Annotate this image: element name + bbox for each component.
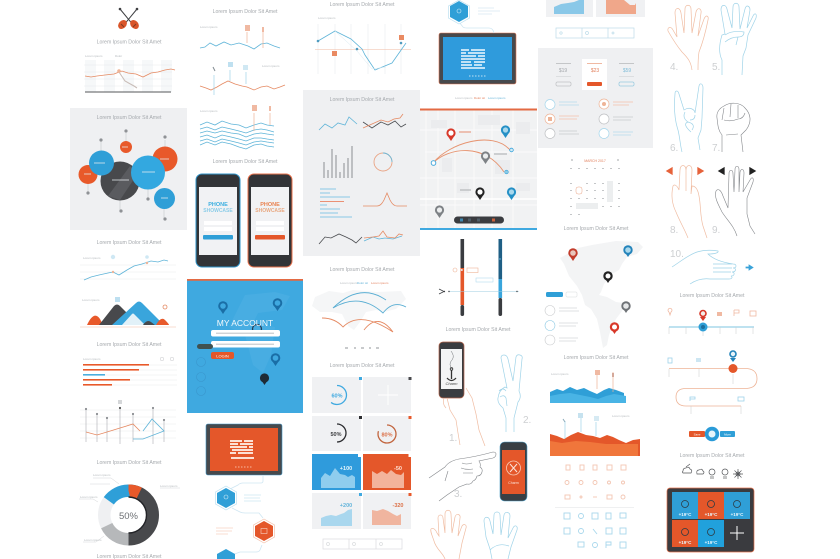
widget: weather tablet: +19°C [679, 512, 692, 517]
hand: four fingers blue bottom [484, 512, 517, 559]
chart: donut 50%: Lorem ipsum [93, 473, 111, 477]
legend: map: Lorem ipsum [455, 96, 473, 100]
chart: mountain area: Lorem ipsum [82, 298, 100, 302]
card: add new [363, 377, 412, 413]
connector: blue hexagon to tablet [459, 22, 494, 33]
heading: oars section: Lorem Ipsum Dolor Sit Amet [97, 40, 162, 46]
widget: weather tablet: +19°C [705, 540, 718, 545]
label: gesture 6: 6. [670, 143, 678, 154]
chart: multi wave lines [200, 105, 274, 149]
chart: peak [363, 193, 407, 206]
chart: blue wave with markers [200, 25, 280, 49]
chart: blue line with markers [315, 16, 411, 74]
hand: victory sign [498, 355, 522, 432]
icon: blue hexagon top [448, 0, 470, 24]
card top: blue area [546, 0, 593, 17]
icon: orange hexagon [254, 519, 274, 543]
phone: orange app [500, 442, 527, 501]
tablet: blue screen [439, 33, 516, 84]
label: gesture 2: 2. [523, 415, 531, 426]
icons: orange set [565, 465, 626, 499]
hand 8: two fingers [672, 166, 707, 238]
heading: calendar: Lorem Ipsum Dolor Sit Amet [564, 226, 629, 232]
widget: weather tablet: +19°C [679, 540, 692, 545]
pricing column highlighted: $23 [591, 68, 599, 74]
chart: multi wave lines: Lorem ipsum [200, 109, 218, 113]
phone: orange login: SHOWCASE [255, 208, 285, 214]
timeline: snake path [668, 350, 757, 414]
phone: blue login [196, 174, 240, 267]
arrows: two finger swipe orange [667, 168, 703, 174]
text: hexagon note top [478, 8, 500, 14]
chart: orange area: Lorem ipsum [612, 414, 630, 418]
legend: world arcs: Lorem ipsum [371, 281, 389, 285]
hand 9: three fingers [715, 166, 755, 236]
heading: dashboard cards: Lorem Ipsum Dolor Sit Amet [330, 363, 395, 369]
hand 6: rock sign [674, 84, 703, 152]
heading: bubble chart: Lorem Ipsum Dolor Sit Amet [97, 115, 162, 121]
line chart: orange trend: Lorem ipsum [85, 54, 103, 58]
arrow: right blue [746, 265, 753, 270]
card: progress 80% [363, 416, 412, 451]
toggle: map filter [546, 292, 577, 297]
legend: world arcs: Lorem ipsum [340, 281, 358, 285]
line chart: orange trend [84, 54, 175, 92]
map: world with arcs [312, 290, 406, 348]
feature list [545, 99, 633, 138]
routes [433, 140, 510, 163]
chart: blue growth line [80, 255, 176, 280]
icon: blue hexagon bottom [217, 549, 235, 559]
panel: pricing [538, 48, 653, 148]
chart: tri lines [364, 236, 402, 241]
chart: dark wave [319, 234, 362, 244]
button: login: LOGIN [216, 353, 229, 358]
hand 4: orange open [668, 5, 708, 70]
heading: gesture hands: Lorem Ipsum Dolor Sit Amet [446, 327, 511, 333]
chart: vertical bars [324, 146, 352, 178]
chart: donut 50% [79, 473, 180, 542]
hand: holding phone [443, 388, 485, 446]
widget: weather tablet: +19°C [705, 512, 718, 517]
widget: weather tablet [667, 488, 754, 552]
chart: horizontal bars [83, 357, 177, 386]
heading: chart column 3: Lorem Ipsum Dolor Sit Amet [330, 2, 395, 8]
heading: phones: Lorem Ipsum Dolor Sit Amet [213, 159, 278, 165]
chart: donut 50%: 50% [119, 511, 139, 522]
chart: orange wave with markers [200, 62, 285, 95]
chart: mountain area [80, 297, 176, 327]
legend: map [455, 96, 506, 100]
text: hexagon note orange [216, 528, 233, 534]
chart: donut 50%: Lorem ipsum [84, 538, 102, 542]
tablet: orange screen [206, 424, 282, 475]
heading: my account: MY ACCOUNT [217, 318, 273, 328]
pricing column right: $59 [623, 68, 631, 74]
chart: blue line with markers: Lorem ipsum [318, 16, 336, 20]
toggle: orange blue switch [689, 427, 735, 441]
card: orange -320 [363, 493, 412, 529]
icon: blue hexagon [216, 486, 236, 510]
card: orange -50 [363, 454, 412, 490]
widget: weather tablet: +19°C [731, 512, 744, 517]
panel: my account login [187, 279, 303, 413]
line chart: orange trend: Dolor [115, 54, 122, 58]
heading: area waves: Lorem Ipsum Dolor Sit Amet [564, 355, 629, 361]
toolbar [454, 216, 504, 224]
timeline: slider with pins [668, 308, 756, 336]
panel: small charts [303, 90, 420, 256]
card: blue +100: +100 [340, 466, 352, 472]
heading: timelines: Lorem Ipsum Dolor Sit Amet [680, 293, 745, 299]
button group: grey [323, 539, 402, 549]
icon: crossed oars [116, 8, 141, 31]
label: gesture 5: 5. [712, 62, 720, 73]
pricing column left: $19 [559, 68, 567, 74]
heading: world arcs: Lorem Ipsum Dolor Sit Amet [330, 267, 395, 273]
pins [568, 245, 633, 334]
label: gesture 9: 9. [712, 225, 720, 236]
card: blue +100 [312, 454, 361, 490]
arrows: three finger swipe dark [719, 168, 755, 174]
list: map legend [545, 306, 579, 345]
form: input fields [197, 330, 280, 349]
chart: small mixed lines [363, 121, 406, 128]
card: orange -50: -50 [394, 466, 402, 472]
phone: orange login [248, 174, 292, 267]
phone: anchor app [439, 342, 464, 398]
heading: weather: Lorem Ipsum Dolor Sit Amet [680, 453, 745, 459]
legend: map: Dolor sit [474, 96, 485, 100]
chart: orange area [550, 413, 640, 456]
label: gesture 3: 3. [454, 489, 462, 500]
legend: map: Lorem ipsum [488, 96, 506, 100]
card: progress 60%: 60% [331, 394, 343, 400]
phone: orange login: PHONE [260, 202, 280, 208]
calendar [570, 159, 620, 215]
chart: blue wave with markers: Lorem ipsum [200, 25, 218, 29]
label: gesture 1: 1. [449, 433, 457, 444]
phone: orange app: Charm [508, 481, 519, 485]
legend: world arcs [340, 281, 389, 285]
card: blue +200 [312, 493, 362, 529]
phone: blue login: PHONE [208, 202, 228, 208]
chart: blue area [550, 370, 626, 403]
chart: orange wave with markers: Lorem ipsum [262, 64, 280, 68]
map: americas with pins [560, 241, 643, 348]
hand 5: blue four fingers [720, 3, 756, 75]
label: gesture 7: 7. [712, 143, 720, 154]
panel: bubble chart [70, 108, 187, 230]
card: progress 50%: 50% [330, 432, 342, 438]
heading: wave charts top: Lorem Ipsum Dolor Sit Amet [213, 9, 278, 15]
icon: map pins [218, 298, 282, 385]
label: gesture 10: 10. [670, 249, 684, 260]
icon: map pins [435, 125, 516, 218]
chart: ring [374, 153, 392, 171]
hand 7: fist [717, 103, 750, 152]
card top: orange area [596, 0, 645, 17]
calendar: MARCH 2017 [584, 159, 606, 163]
label: gesture 4: 4. [670, 62, 678, 73]
icons: weather set [682, 464, 743, 479]
icons: blue set [564, 513, 626, 548]
toggle: orange blue switch: More [724, 432, 731, 436]
chart: horizontal bars: Lorem ipsum [83, 357, 101, 361]
heading: small charts: Lorem Ipsum Dolor Sit Amet [330, 97, 395, 103]
card: blue +200: +200 [340, 503, 352, 509]
heading: donut: Lorem Ipsum Dolor Sit Amet [97, 460, 162, 466]
heading: area charts: Lorem Ipsum Dolor Sit Amet [97, 240, 162, 246]
button group: blue outline [556, 28, 634, 38]
card: progress 80%: 80% [381, 432, 393, 438]
slider: vertical orange and dark with scissors [439, 239, 519, 316]
chart: small blue line [319, 117, 357, 130]
connector: timeline hexes [230, 475, 263, 555]
phone: anchor app: Charm [445, 381, 458, 386]
chart: list bars [320, 189, 352, 217]
card: orange -320: -320 [392, 503, 404, 509]
hand: open orange bottom [431, 510, 466, 559]
icons: side circles [196, 358, 206, 396]
map: city with routes [420, 108, 537, 230]
chart: lollipop multi-line [80, 400, 176, 444]
heading: bars: Lorem Ipsum Dolor Sit Amet [97, 342, 162, 348]
card: progress 60% [312, 377, 362, 413]
hand: pointing [429, 452, 496, 501]
label: gesture 8: 8. [670, 225, 678, 236]
phone: blue login: SHOWCASE [203, 208, 233, 214]
card: progress 50% [312, 416, 362, 451]
legend: world arcs: Dolor sit [357, 281, 368, 285]
toggle: orange blue switch: Save [694, 432, 701, 436]
chart: donut 50%: Lorem ipsum [80, 495, 98, 499]
chart: donut 50%: Lorem ipsum [160, 484, 178, 488]
text: hexagon note blue [244, 495, 261, 501]
hand 10: flat [672, 250, 736, 284]
chart: blue area: Lorem ipsum [551, 372, 569, 376]
chart: blue growth line: Lorem ipsum [83, 256, 101, 260]
